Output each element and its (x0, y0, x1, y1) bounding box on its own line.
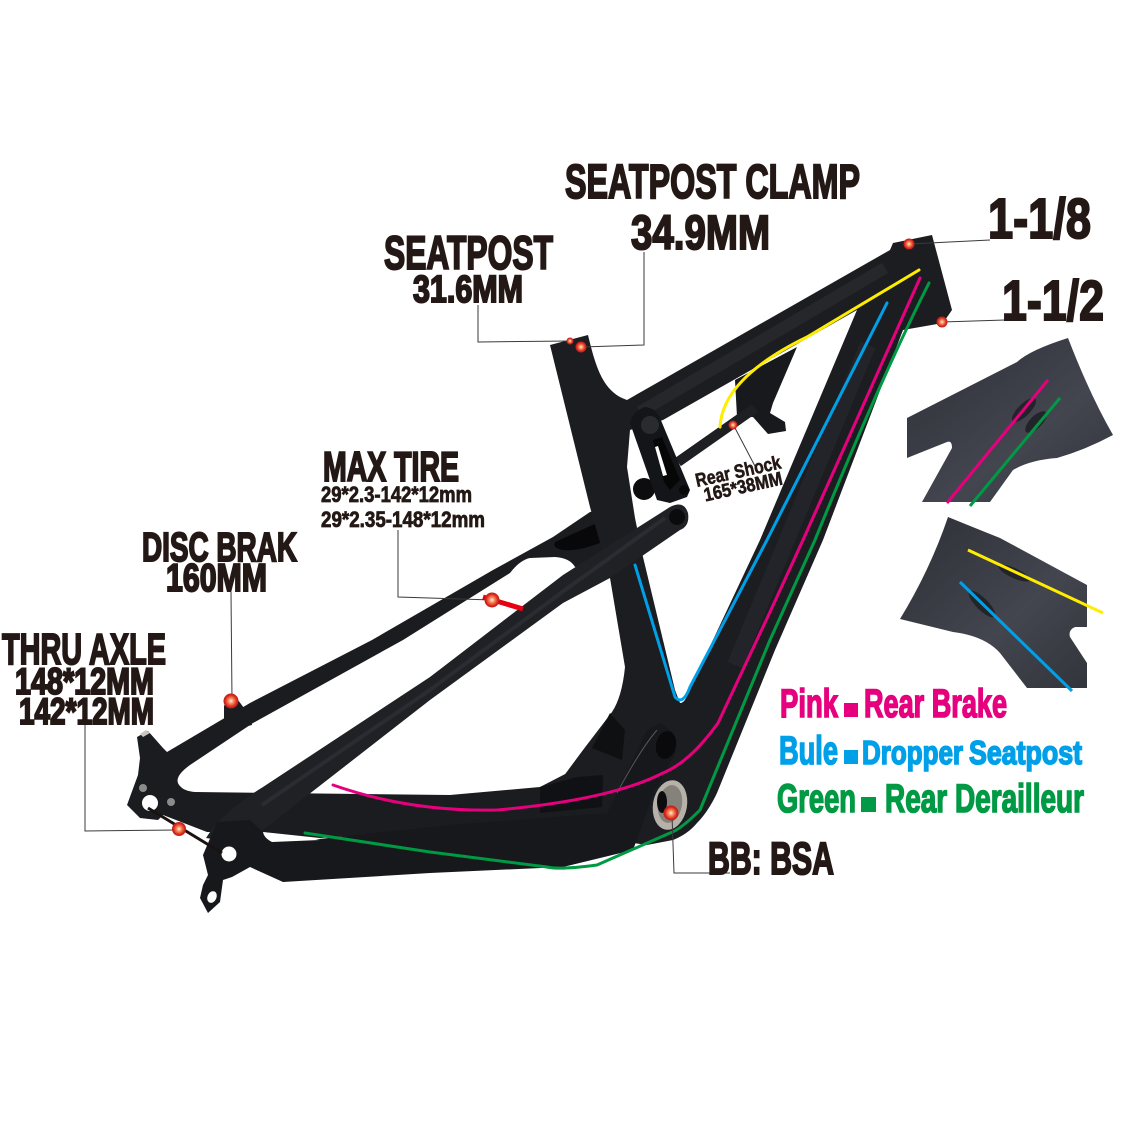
cable port upper (996, 561, 1032, 585)
swing link line (617, 730, 657, 793)
legend: green rear derailleur (777, 777, 1084, 821)
lower pivot bolt (653, 729, 679, 761)
rocker pivot bolt (669, 509, 685, 525)
axle cap (140, 730, 150, 737)
leader: bottom bracket (672, 815, 730, 873)
legend: blue dropper seatpost: Dropper (862, 734, 963, 771)
legend: blue dropper seatpost: Bule (779, 729, 838, 773)
chainstay slit (263, 832, 320, 842)
far dropout bolts (139, 784, 175, 806)
legend: pink rear brake: Pink (780, 682, 839, 726)
bike frame illustration (127, 235, 952, 913)
label: seatpost clamp: 34.9MM (631, 207, 770, 260)
brake mount tab (224, 697, 252, 732)
pink square (844, 703, 858, 717)
leader: rear shock (735, 428, 757, 470)
label: seatpost: 31.6MM (413, 269, 523, 311)
routing line: yellow (720, 270, 919, 427)
marker dots (172, 238, 948, 836)
inset green line (970, 398, 1060, 506)
rocker link (630, 407, 690, 503)
label: thru axle: THRU AXLE (2, 625, 166, 674)
front triangle (540, 235, 952, 845)
blue square (844, 750, 858, 764)
routing line: blue dropper (635, 303, 887, 700)
near stay highlight (262, 518, 665, 805)
legend: pink rear brake: Rear Brake (864, 682, 1007, 726)
leader: thru axle (85, 725, 178, 831)
axle width marker line (148, 808, 222, 853)
label: rear shock: Rear Shock (694, 452, 783, 492)
leader: disc brake (231, 592, 232, 700)
label: max tire (321, 443, 485, 532)
label: disc brake: DISC BRAK (142, 524, 297, 570)
inset pink line (947, 380, 1048, 503)
label: rear shock: 165*38MM (702, 469, 785, 506)
label: 1-1/2 headset: 1-1/2 (1002, 269, 1104, 333)
lower seat tube pocket (592, 713, 625, 760)
far seat stay and far chainstay (127, 505, 640, 838)
label: max tire: 29*2.3-142*12mm (321, 482, 472, 507)
label: rear shock (694, 452, 787, 508)
leader: 1-1/2 (942, 320, 1005, 322)
green square (861, 797, 876, 812)
label: disc brake: 160MM (166, 557, 267, 600)
inset: head tube right side (907, 338, 1113, 506)
shock mount wedge (735, 347, 797, 434)
label: bottom bracket: BB: BSA (708, 833, 834, 884)
stay upper recess (554, 523, 600, 550)
rocker bolt (641, 416, 659, 434)
label: seatpost clamp: SEATPOST CLAMP (565, 156, 860, 209)
near seat stay (206, 505, 688, 842)
leader: max tire (398, 530, 492, 600)
chainstay pocket (540, 775, 603, 813)
routing line: pink brake (333, 278, 920, 810)
inset: head tube left side (900, 517, 1103, 691)
far dropout axle hole (142, 795, 158, 811)
bottom bracket shell (649, 777, 691, 833)
label: disc brake (142, 524, 297, 600)
rocker lower bolt (679, 485, 689, 495)
cable port pink (1008, 394, 1040, 426)
down tube highlight (735, 345, 868, 665)
max tire red marker (483, 597, 523, 609)
cable port lower (965, 587, 999, 621)
inset blue line (960, 582, 1072, 691)
label: thru axle: 142*12MM (19, 691, 154, 732)
legend: green rear derailleur: Green (777, 777, 856, 821)
leader: seatpost (478, 305, 570, 342)
legend: pink rear brake (780, 682, 1007, 726)
routing line: green derailleur (305, 283, 929, 868)
bottom bracket bore (657, 791, 667, 813)
legend: blue dropper seatpost (779, 729, 1082, 773)
legend: blue dropper seatpost: Seatpost (969, 734, 1082, 771)
leader: seatpost clamp (582, 252, 644, 347)
label: max tire: MAX TIRE (323, 443, 459, 490)
label: seatpost: SEATPOST (384, 226, 553, 279)
inset yellow line (968, 550, 1103, 613)
rocker slot (655, 446, 667, 476)
rear shock body (678, 408, 755, 462)
label: seatpost clamp (565, 156, 860, 260)
near dropout hole (222, 846, 236, 862)
label: seatpost (384, 226, 553, 311)
label: 1-1/8 headset: 1-1/8 (988, 187, 1091, 251)
leader: 1-1/8 (909, 240, 990, 244)
cable port green (1022, 408, 1050, 436)
bottom bracket inner (655, 783, 685, 825)
rocker recess (653, 437, 680, 490)
shock reservoir (633, 478, 655, 500)
top tube highlight (640, 268, 885, 412)
label: thru axle: 148*12MM (15, 661, 154, 702)
hanger hole (205, 890, 219, 904)
label: max tire: 29*2.35-148*12mm (321, 507, 485, 532)
label: thru axle (2, 625, 166, 732)
near chainstay and hanger (200, 723, 676, 913)
